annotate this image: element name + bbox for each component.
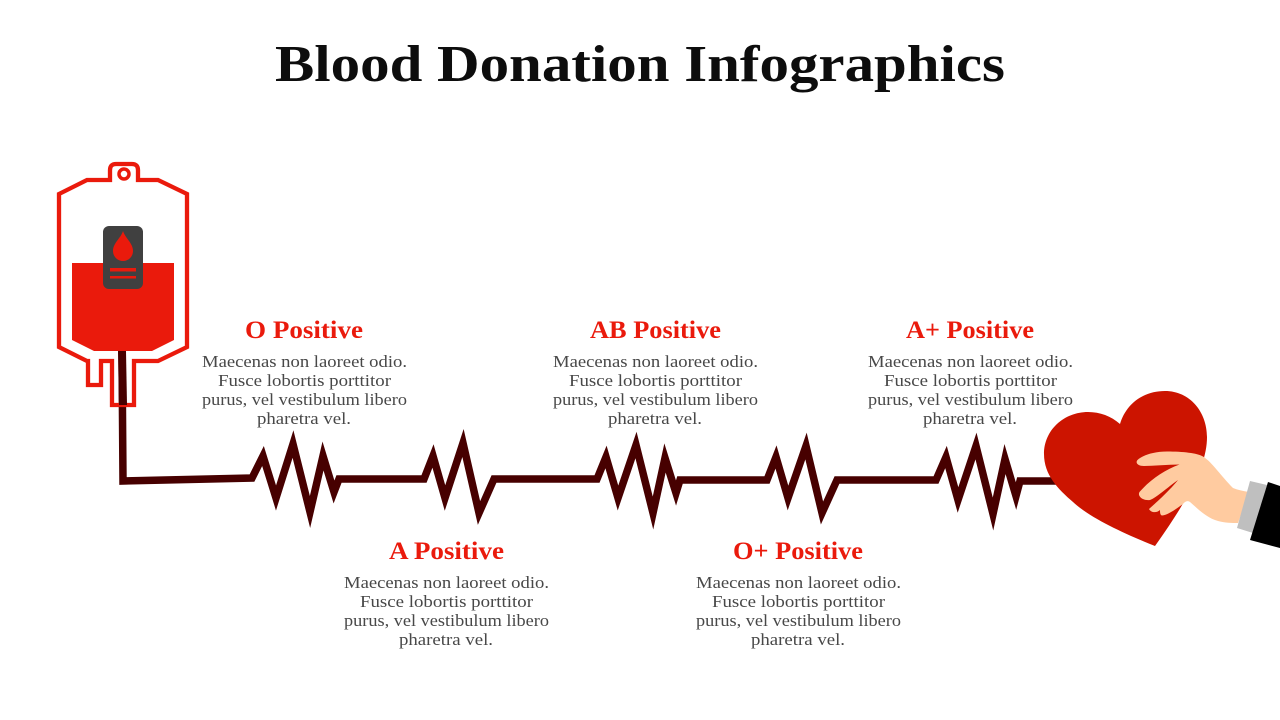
text block: O Positive: Fusce lobortis porttitor xyxy=(218,371,391,390)
text block: AB Positive: Maecenas non laoreet odio. xyxy=(553,352,758,371)
text block: A Positive: Maecenas non laoreet odio. xyxy=(344,573,549,592)
text block: A Positive: A Positive xyxy=(389,538,504,565)
text block: AB Positive: purus, vel vestibulum libero xyxy=(553,390,758,409)
blood fill xyxy=(72,263,174,351)
text block: AB Positive: pharetra vel. xyxy=(608,409,702,428)
text block: AB Positive xyxy=(553,317,758,428)
text block: O Positive: O Positive xyxy=(245,317,363,344)
text block: A+ Positive: purus, vel vestibulum libero xyxy=(868,390,1073,409)
text block: A+ Positive: Maecenas non laoreet odio. xyxy=(868,352,1073,371)
text block: O+ Positive: O+ Positive xyxy=(733,538,863,565)
text block: A Positive: pharetra vel. xyxy=(399,630,493,649)
text block: A+ Positive: A+ Positive xyxy=(906,317,1034,344)
text block: O Positive: Maecenas non laoreet odio. xyxy=(202,352,407,371)
icon: blood bag xyxy=(59,164,187,405)
hand xyxy=(1137,452,1249,523)
icon: blood drop xyxy=(113,231,133,261)
hanger hole xyxy=(119,169,129,179)
icon: hand holding heart xyxy=(1044,391,1280,548)
blood bag outline xyxy=(59,164,187,405)
tube inside bag xyxy=(118,351,127,405)
text block: A+ Positive: pharetra vel. xyxy=(923,409,1017,428)
text block: O+ Positive: pharetra vel. xyxy=(751,630,845,649)
jacket sleeve xyxy=(1250,482,1280,548)
text block: O Positive xyxy=(202,317,407,428)
bag label xyxy=(103,226,143,289)
heart xyxy=(1044,391,1207,546)
text block: O+ Positive: purus, vel vestibulum libero xyxy=(696,611,901,630)
text block: A+ Positive: Fusce lobortis porttitor xyxy=(884,371,1057,390)
text block: O+ Positive: Maecenas non laoreet odio. xyxy=(696,573,901,592)
text block: A Positive: Fusce lobortis porttitor xyxy=(360,592,533,611)
text block: A Positive: purus, vel vestibulum libero xyxy=(344,611,549,630)
text block: AB Positive: AB Positive xyxy=(590,317,721,344)
title: Blood Donation Infographics xyxy=(275,36,1005,93)
text block: O Positive: purus, vel vestibulum libero xyxy=(202,390,407,409)
label lines xyxy=(110,268,136,278)
shirt cuff xyxy=(1237,481,1267,533)
text block: A Positive xyxy=(344,538,549,649)
text block: O Positive: pharetra vel. xyxy=(257,409,351,428)
text block: AB Positive: Fusce lobortis porttitor xyxy=(569,371,742,390)
heartbeat tube line xyxy=(122,351,1065,514)
text block: O+ Positive: Fusce lobortis porttitor xyxy=(712,592,885,611)
text block: O+ Positive xyxy=(696,538,901,649)
text block: A+ Positive xyxy=(868,317,1073,428)
